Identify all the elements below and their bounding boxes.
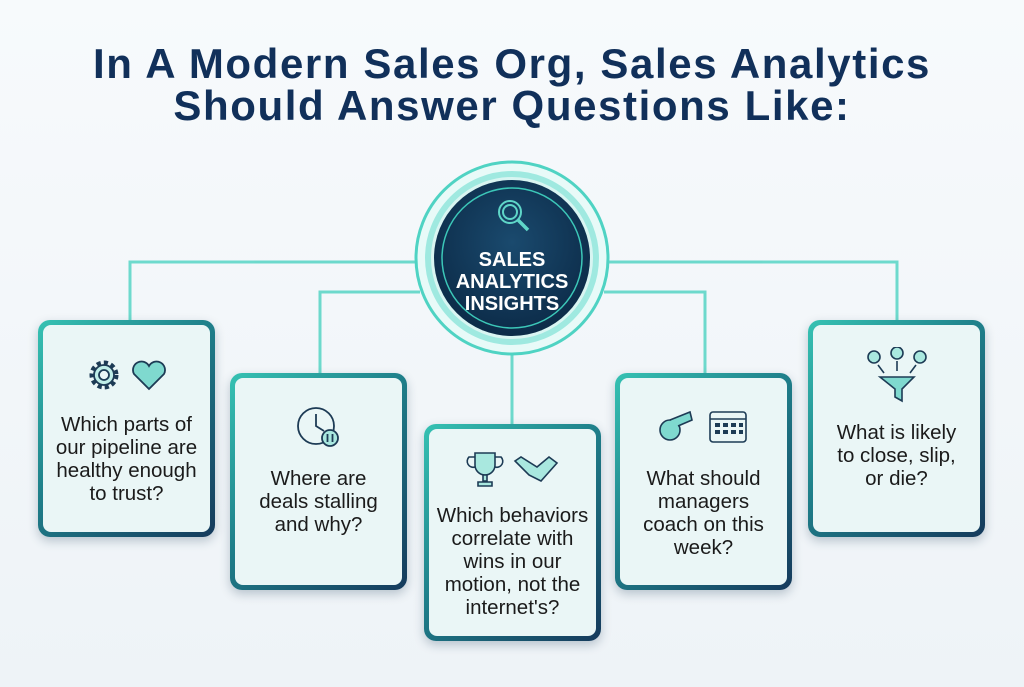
card 4: coach on this — [643, 513, 764, 536]
card 5: to close, slip, — [837, 444, 956, 467]
card 4: week? — [674, 536, 733, 559]
card 3: wins in our — [464, 550, 562, 573]
icon: whistle and calendar — [659, 410, 747, 443]
card 1: our pipeline are — [56, 436, 197, 459]
card 3 — [424, 424, 601, 641]
card 4: managers — [658, 490, 749, 513]
card 4: What should — [647, 467, 760, 490]
icon: funnel outcomes — [867, 347, 927, 402]
hub label: INSIGHTS — [465, 293, 559, 315]
card 1 — [38, 320, 215, 537]
icon: trophy and handshake — [466, 452, 558, 487]
card 4 — [615, 373, 792, 590]
card 3: correlate with — [452, 527, 573, 550]
card 1: Which parts of — [61, 413, 192, 436]
hub label: ANALYTICS — [456, 271, 568, 293]
card 2: deals stalling — [259, 490, 378, 513]
icon: clock pause — [297, 407, 339, 447]
card 5 — [808, 320, 985, 537]
center hub — [414, 160, 610, 356]
card 2: Where are — [271, 467, 366, 490]
hub label — [456, 249, 568, 315]
card 3: motion, not the — [445, 573, 580, 596]
hub label: SALES — [479, 249, 545, 271]
card 2 — [230, 373, 407, 590]
card 3: internet's? — [466, 596, 559, 619]
card 5: or die? — [865, 467, 928, 490]
card 5: What is likely — [837, 421, 956, 444]
icon: magnifier — [499, 201, 528, 230]
card 1: to trust? — [89, 482, 164, 505]
card 1: healthy enough — [56, 459, 197, 482]
title — [93, 40, 931, 129]
title: In A Modern Sales Org, Sales Analytics — [93, 40, 931, 87]
icon: gear and heart — [90, 360, 166, 390]
card 3: Which behaviors — [437, 504, 588, 527]
card 2: and why? — [275, 513, 362, 536]
title: Should Answer Questions Like: — [173, 82, 851, 129]
